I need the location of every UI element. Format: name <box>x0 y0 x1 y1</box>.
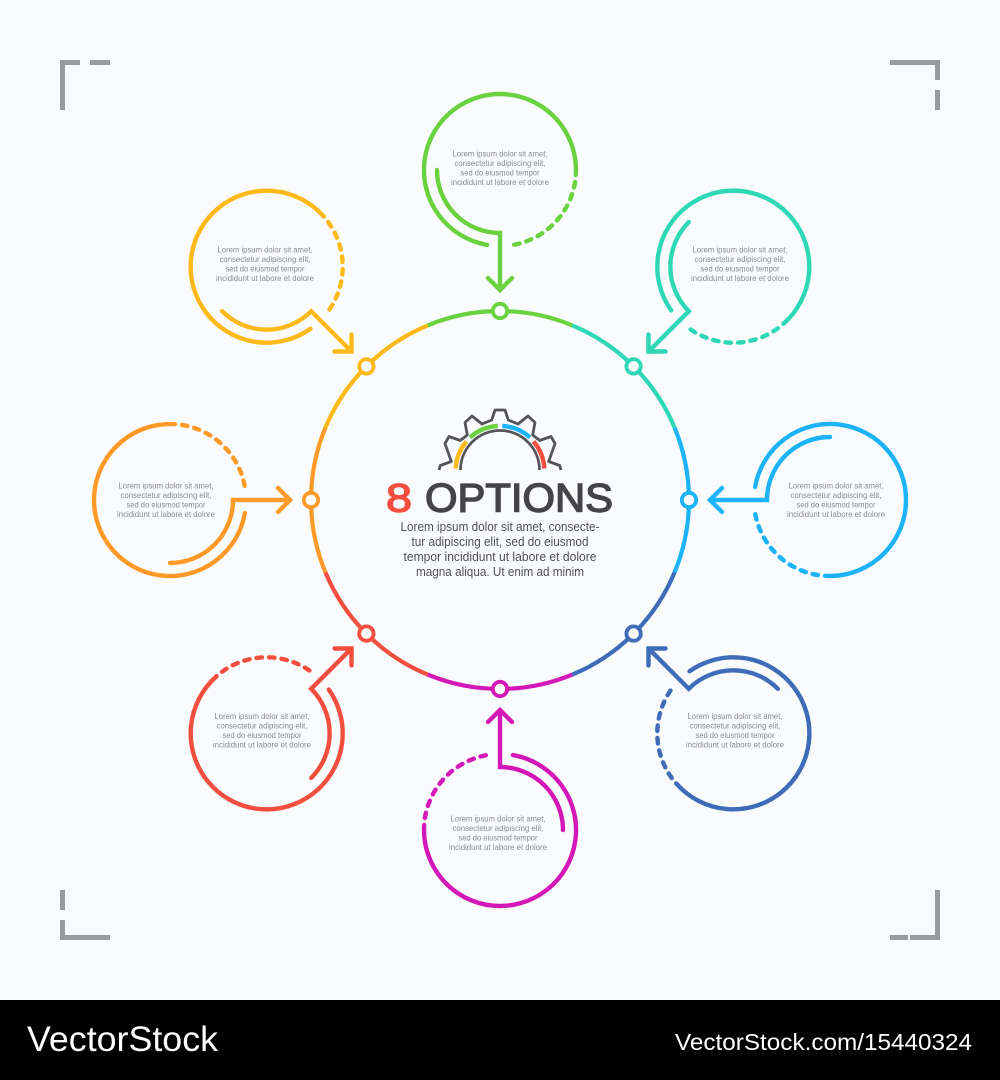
option 3: blue <box>710 424 906 576</box>
central description text: tempor incididunt ut labore et dolore <box>404 550 596 564</box>
option 8: yellow: incididunt ut labore et dolore <box>216 273 314 283</box>
option 2: teal: Lorem ipsum dolor sit amet, <box>692 244 788 254</box>
option 5: magenta: Lorem ipsum dolor sit amet, <box>450 814 546 824</box>
option 6: red: consectetur adipiscing elit, <box>216 720 308 730</box>
option 7: orange <box>94 424 290 576</box>
option 5: magenta <box>424 710 576 906</box>
footer image id: VectorStock.com/15440324 <box>675 1029 972 1055</box>
option 6: red: sed do eiusmod tempor <box>222 730 302 740</box>
option 6: red <box>159 595 405 841</box>
corner bracket: top right <box>890 60 940 110</box>
icon: gear with coloured arcs <box>439 410 561 470</box>
option 4: dark blue: consectetur adipiscing elit, <box>690 720 780 730</box>
option 4: dark blue <box>595 595 841 841</box>
option 8: yellow: consectetur adipiscing elit, <box>220 254 310 264</box>
central description text: magna aliqua. Ut enim ad minim <box>416 565 584 579</box>
corner bracket: bottom right <box>890 890 940 940</box>
central segmented ring <box>311 311 689 689</box>
option 3: blue: sed do eiusmod tempor <box>796 500 876 510</box>
option 8: yellow <box>159 159 405 405</box>
option 5: magenta: incididunt ut labore et dolore <box>449 842 547 852</box>
option 1: green: sed do eiusmod tempor <box>460 168 540 178</box>
option 4: dark blue: Lorem ipsum dolor sit amet, <box>688 711 782 721</box>
option 5: magenta: sed do eiusmod tempor <box>458 832 538 842</box>
option 1: green: incididunt ut labore et dolore <box>451 177 549 187</box>
ring nodes <box>304 304 696 696</box>
option 3: blue: consectetur adipiscing elit, <box>790 490 882 500</box>
option 5: magenta: consectetur adipiscing elit, <box>452 823 544 833</box>
option 2: teal: incididunt ut labore et dolore <box>691 273 789 283</box>
option 7: orange: incididunt ut labore et dolore <box>117 509 215 519</box>
option 1: green: Lorem ipsum dolor sit amet, <box>452 148 548 158</box>
option 7: orange: consectetur adipiscing elit, <box>120 490 212 500</box>
option 1: green: consectetur adipiscing elit, <box>454 158 546 168</box>
central description text: Lorem ipsum dolor sit amet, consecte- <box>400 520 600 534</box>
option 2: teal: consectetur adipiscing elit, <box>694 254 786 264</box>
option 4: dark blue: sed do eiusmod tempor <box>696 730 775 740</box>
central description text <box>400 520 600 579</box>
option 2: teal: sed do eiusmod tempor <box>700 264 780 274</box>
option 4: dark blue: incididunt ut labore et dolore <box>686 740 784 750</box>
option 2: teal <box>595 159 841 405</box>
corner bracket: bottom left <box>60 890 110 940</box>
option 3: blue: Lorem ipsum dolor sit amet, <box>788 480 884 490</box>
corner bracket: top left <box>60 60 110 110</box>
footer bar <box>0 1000 1000 1080</box>
title: 8 OPTIONS: OPTIONS <box>425 476 613 520</box>
central description text: tur adipiscing elit, sed do eiusmod <box>412 535 588 549</box>
option 3: blue: incididunt ut labore et dolore <box>787 509 885 519</box>
option 8: yellow: sed do eiusmod tempor <box>226 264 305 274</box>
option 6: red: incididunt ut labore et dolore <box>213 740 311 750</box>
option 6: red: Lorem ipsum dolor sit amet, <box>214 711 310 721</box>
option 8: yellow: Lorem ipsum dolor sit amet, <box>218 244 312 254</box>
footer brand: VectorStock <box>27 1020 219 1059</box>
option 7: orange: Lorem ipsum dolor sit amet, <box>118 480 214 490</box>
option 7: orange: sed do eiusmod tempor <box>126 500 206 510</box>
option 1: green <box>424 94 576 290</box>
title: 8 OPTIONS: 8 <box>386 476 412 520</box>
